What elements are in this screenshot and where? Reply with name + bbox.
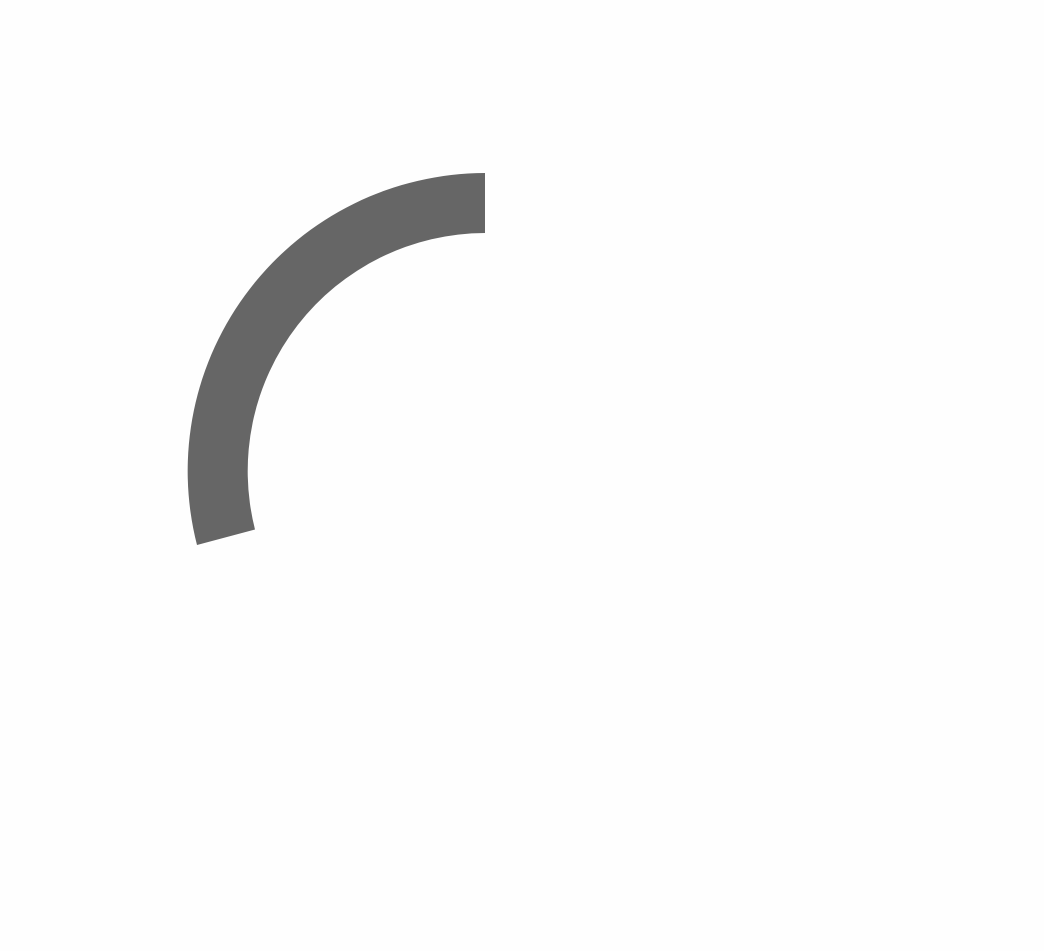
arc segment <box>188 173 485 545</box>
